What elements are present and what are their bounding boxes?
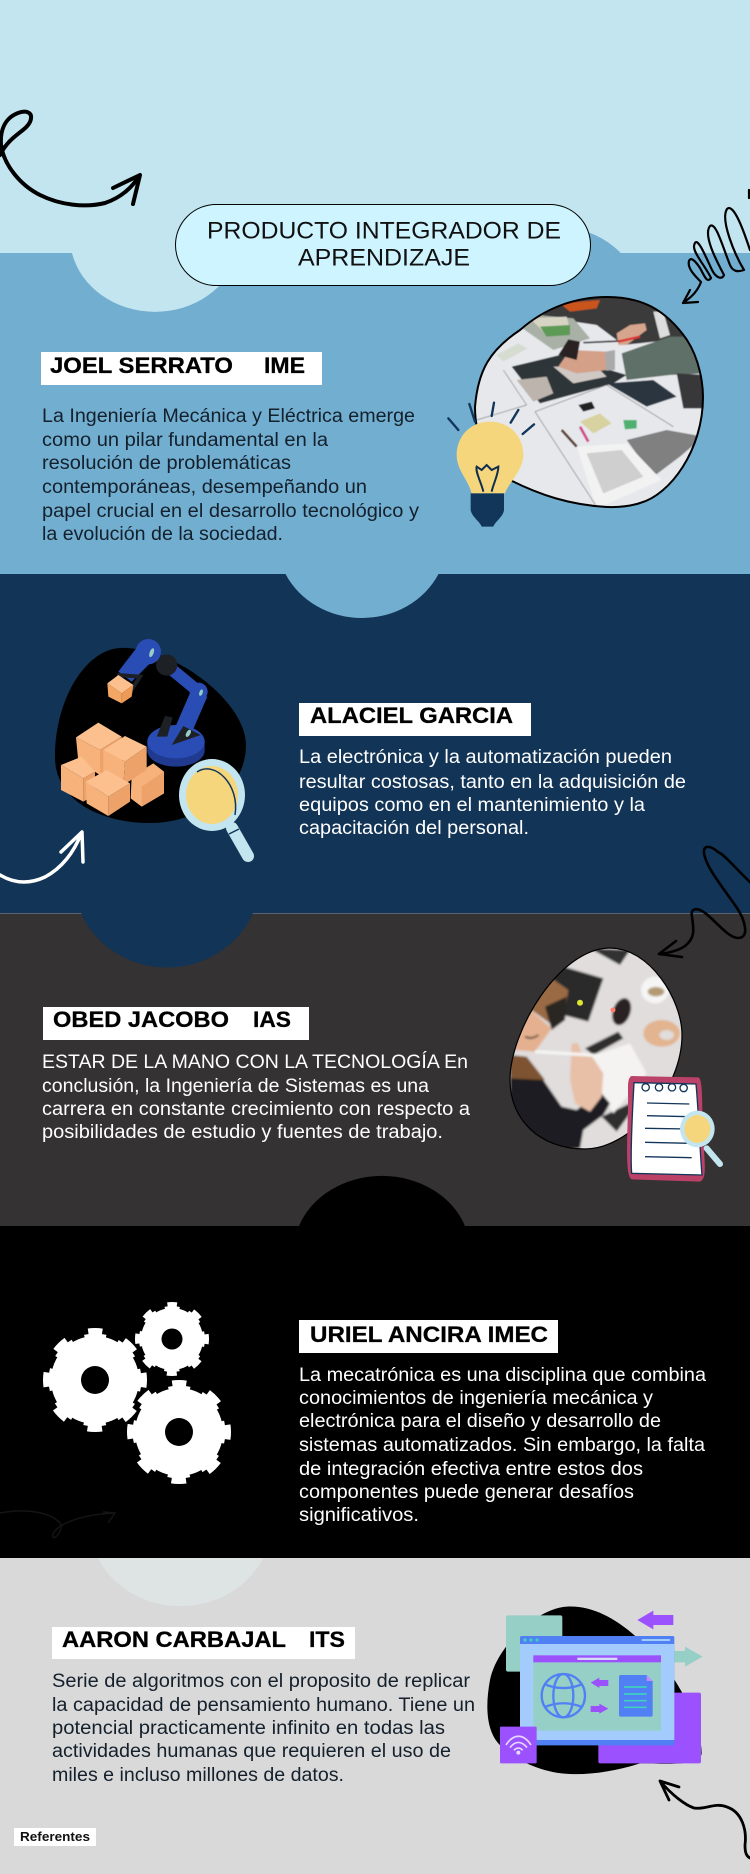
text block: electrónica y automatización: La electrónica y la automatización pueden xyxy=(299,747,672,768)
panel: Joel Serrato IME xyxy=(0,225,750,574)
name label: Uriel Ancira xyxy=(299,1320,558,1353)
button: Referentes xyxy=(14,1828,96,1846)
text block: inteligencia artificial: actividades humanas que requieren el uso de xyxy=(52,1741,451,1762)
arrow: black squiggle bottom right xyxy=(660,1781,750,1858)
text block: inteligencia artificial: miles e incluso millones de datos. xyxy=(52,1765,344,1786)
arrow: black curl top left xyxy=(0,112,140,205)
arrow: black spiral top right xyxy=(683,190,750,303)
name label: Aaron Carbajal: ITS xyxy=(309,1627,345,1652)
text block: mecánica y eléctrica xyxy=(42,406,420,545)
text block: mecatrónica: electrónica para el diseño y desarrollo de xyxy=(299,1411,661,1432)
text block: mecánica y eléctrica: papel crucial en el desarrollo tecnológico y xyxy=(42,501,420,522)
name label: Obed Jacobo: IAS xyxy=(253,1007,291,1032)
text block: mecatrónica: componentes puede generar desafíos xyxy=(299,1482,634,1503)
text block: electrónica y automatización: equipos como en el mantenimiento y la xyxy=(299,795,645,816)
name label: Aaron Carbajal: AARON CARBAJAL xyxy=(62,1627,286,1652)
panel: Alaciel Garcia xyxy=(0,574,750,913)
icon: three white gears xyxy=(48,1306,226,1478)
icon: notepad with magnifier xyxy=(627,1076,720,1182)
title pill: APRENDIZAJE xyxy=(298,244,470,272)
text block: mecatrónica: conocimientos de ingeniería mecánica y xyxy=(299,1388,654,1409)
text block: mecánica y eléctrica: resolución de problemáticas xyxy=(42,453,291,474)
panel: Uriel Ancira IMEC xyxy=(0,1176,750,1558)
name label: Joel Serrato: IME xyxy=(264,353,305,378)
text block: electrónica y automatización: capacitación del personal. xyxy=(299,818,529,839)
icon: light bulb xyxy=(448,403,534,527)
button: Referentes: Referentes xyxy=(20,1830,90,1844)
name label: Alaciel Garcia: ALACIEL GARCIA xyxy=(310,703,513,728)
name label: Obed Jacobo xyxy=(43,1007,309,1040)
illustration: browser window with globe and document xyxy=(487,1607,703,1774)
text block: ingeniería de sistemas: conclusión, la Ingeniería de Sistemas es una xyxy=(42,1076,429,1097)
arrow: faint dark squiggle xyxy=(0,1511,115,1538)
photo: woman with pen at a desk xyxy=(509,947,683,1150)
text block: mecánica y eléctrica: la evolución de la sociedad. xyxy=(42,524,283,545)
text block: mecatrónica: de integración efectiva entre estos dos xyxy=(299,1459,643,1480)
text block: ingeniería de sistemas: carrera en constante crecimiento con respecto a xyxy=(42,1099,470,1120)
illustration: robot arm and boxes on a black blob xyxy=(55,639,246,823)
panel: Aaron Carbajal ITS xyxy=(0,1558,750,1874)
title pill xyxy=(176,204,590,286)
text block: mecatrónica: significativos. xyxy=(299,1505,419,1526)
name label: Alaciel Garcia xyxy=(299,703,531,736)
name label: Joel Serrato: JOEL SERRATO xyxy=(50,353,233,378)
panel: top header background xyxy=(0,0,750,253)
panel: Obed Jacobo IAS xyxy=(0,913,750,1226)
text block: mecatrónica xyxy=(299,1365,706,1526)
name label: Obed Jacobo: OBED JACOBO xyxy=(53,1007,229,1032)
text block: electrónica y automatización: resultar costosas, tanto en la adquisición de xyxy=(299,772,686,793)
text block: mecatrónica: La mecatrónica es una disciplina que combina xyxy=(299,1365,706,1386)
text block: inteligencia artificial xyxy=(52,1671,475,1786)
photo: hands cutting magazines on a table xyxy=(470,290,710,513)
text block: mecánica y eléctrica: contemporáneas, desempeñando un xyxy=(42,477,367,498)
text block: mecánica y eléctrica: como un pilar fundamental en la xyxy=(42,430,328,451)
name label: Joel Serrato xyxy=(41,352,322,385)
text block: mecatrónica: sistemas automatizados. Sin embargo, la falta xyxy=(299,1435,705,1456)
text block: ingeniería de sistemas xyxy=(42,1052,470,1143)
text block: ingeniería de sistemas: posibilidades de estudio y fuentes de trabajo. xyxy=(42,1122,443,1143)
name label: Uriel Ancira: URIEL ANCIRA IMEC xyxy=(310,1322,548,1347)
text block: inteligencia artificial: Serie de algoritmos con el proposito de replicar xyxy=(52,1671,471,1692)
text block: mecánica y eléctrica: La Ingeniería Mecánica y Eléctrica emerge xyxy=(42,406,415,427)
arrow: black squiggle right xyxy=(659,847,750,957)
name label: Aaron Carbajal xyxy=(52,1627,355,1659)
title pill: PRODUCTO INTEGRADOR DE xyxy=(207,218,561,244)
text block: inteligencia artificial: potencial practicamente infinito en todas las xyxy=(52,1718,445,1739)
text block: ingeniería de sistemas: ESTAR DE LA MANO CON LA TECNOLOGÍA En xyxy=(42,1052,468,1073)
arrow: white curve xyxy=(0,832,83,882)
icon: magnifying glass xyxy=(179,759,248,856)
text block: electrónica y automatización xyxy=(299,747,686,839)
text block: inteligencia artificial: la capacidad de pensamiento humano. Tiene un xyxy=(52,1695,475,1716)
